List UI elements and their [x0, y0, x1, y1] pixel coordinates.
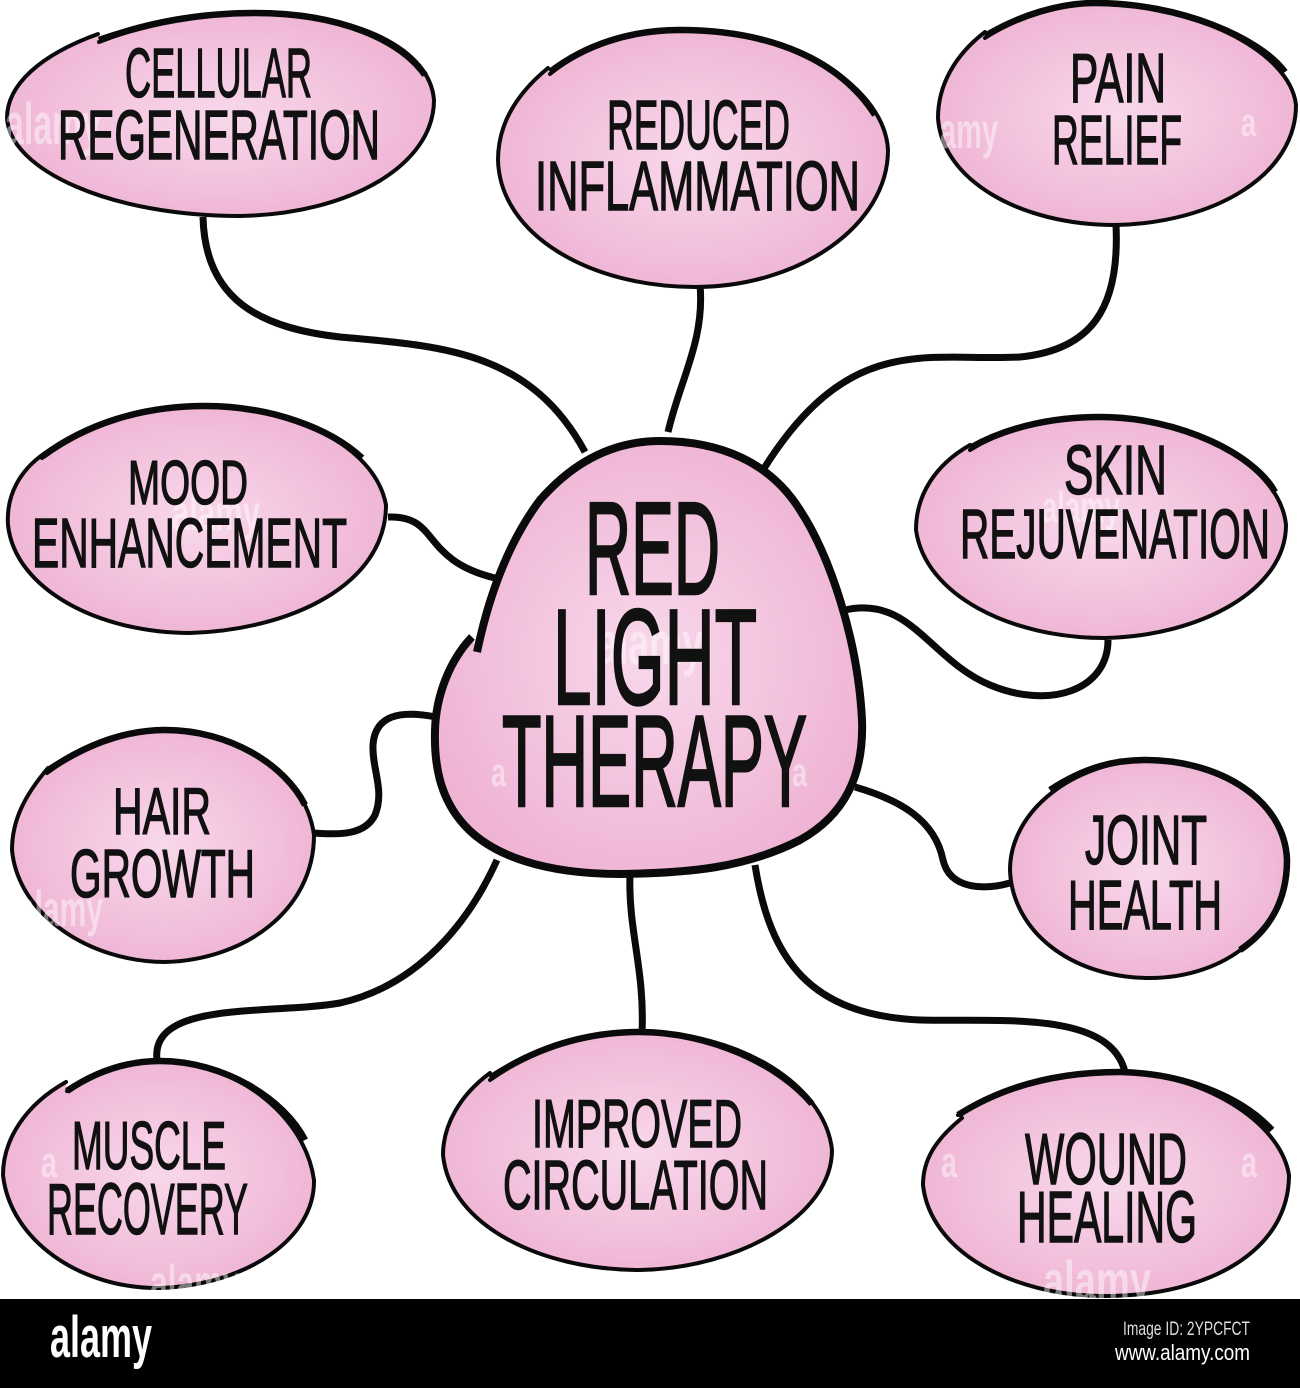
node: mood enhancement — [8, 406, 386, 633]
node: improved circulation — [443, 1032, 832, 1270]
node: wound healing: a — [1241, 1138, 1257, 1187]
website: www.alamy.com — [1114, 1340, 1250, 1365]
central node: red light therapy — [435, 441, 862, 874]
node: muscle recovery: alamy — [150, 1255, 240, 1311]
central node: red light therapy: a — [491, 751, 507, 795]
node: hair growth — [12, 730, 314, 962]
node: mood enhancement: alamy — [172, 485, 260, 541]
node: wound healing — [923, 1072, 1289, 1312]
node: improved circulation: IMPROVED — [532, 1086, 742, 1162]
node: pain relief: RELIEF — [1052, 101, 1182, 179]
connector: skin rejuvenation — [845, 608, 1108, 696]
node: cellular regeneration: a — [342, 101, 358, 145]
footer logo: alamy — [50, 1305, 152, 1370]
connector: joint health — [855, 787, 1010, 887]
node: joint health: JOINT — [1085, 801, 1207, 879]
connector: muscle recovery — [157, 860, 497, 1060]
node: hair growth: HAIR — [113, 774, 211, 848]
node: cellular regeneration: alamy — [5, 92, 101, 157]
image id: Image ID: 2YPCFCT — [1123, 1319, 1250, 1340]
connector: pain relief — [763, 225, 1116, 470]
node: pain relief: amy — [940, 103, 998, 159]
connector: hair growth — [314, 714, 436, 834]
node: pain relief: a — [1241, 101, 1257, 145]
central node: red light therapy: RED — [585, 475, 720, 622]
node: reduced inflammation: INFLAMMATION — [535, 147, 860, 225]
node: muscle recovery: RECOVERY — [47, 1170, 248, 1250]
node: pain relief: PAIN — [1070, 39, 1166, 117]
node: pain relief — [938, 3, 1296, 225]
footer bar — [0, 1299, 1300, 1388]
central node: red light therapy: a — [792, 751, 808, 795]
connector: cellular regeneration — [203, 217, 585, 452]
connector: wound healing — [755, 865, 1125, 1072]
node: cellular regeneration: CELLULAR — [125, 34, 312, 112]
node: improved circulation: CIRCULATION — [503, 1146, 768, 1224]
node: skin rejuvenation: alamy — [1042, 483, 1120, 532]
node: reduced inflammation: REDUCED — [607, 86, 790, 164]
node: wound healing: WOUND — [1025, 1120, 1187, 1200]
connector: mood enhancement — [388, 517, 495, 578]
node: muscle recovery: a — [41, 1138, 57, 1187]
node: mood enhancement: MOOD — [128, 449, 248, 518]
connector: reduced inflammation — [668, 285, 701, 432]
node: wound healing: alamy — [1043, 1249, 1151, 1312]
node: muscle recovery: MUSCLE — [72, 1108, 226, 1184]
node: hair growth: GROWTH — [70, 836, 255, 912]
connectors — [157, 217, 1125, 1072]
node: reduced inflammation — [498, 30, 888, 287]
watermark: alamy — [597, 610, 703, 677]
node: mood enhancement: ENHANCEMENT — [32, 504, 347, 582]
node: joint health — [1010, 760, 1287, 978]
node: muscle recovery — [3, 1061, 314, 1311]
node: hair growth: alamy — [18, 881, 103, 937]
central node: red light therapy: THERAPY — [502, 688, 807, 834]
node: skin rejuvenation — [916, 417, 1286, 638]
node: cellular regeneration: REGENERATION — [58, 96, 380, 174]
connector: improved circulation — [630, 875, 642, 1033]
node: wound healing: a — [941, 1138, 957, 1187]
central node: red light therapy: LIGHT — [553, 581, 757, 733]
node: skin rejuvenation: SKIN — [1064, 431, 1167, 509]
node: cellular regeneration — [5, 13, 434, 216]
